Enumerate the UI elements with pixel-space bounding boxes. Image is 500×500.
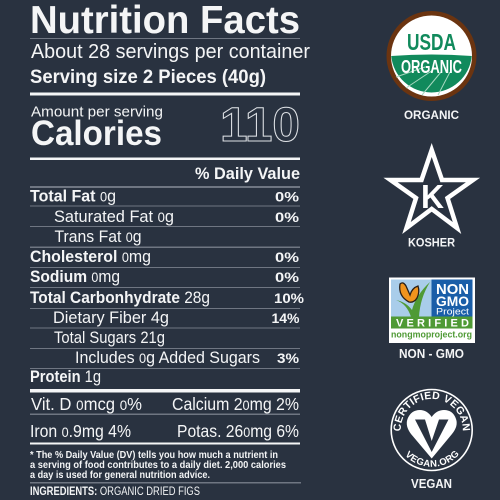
row: total fat: Total Fat 0g (30, 186, 116, 206)
row: vitamin d and calcium: Calcium 20mg 2% (172, 394, 299, 414)
badge: usda organic (386, 11, 476, 122)
badge: kosher (390, 150, 473, 250)
row: cholesterol (30, 247, 300, 266)
row: iron and potassium: Iron 0.9mg 4% (30, 421, 131, 441)
footnote (30, 449, 286, 481)
row: dietary fiber (53, 308, 300, 327)
icon: non-gmo project verified: Project (436, 306, 469, 318)
footnote: * The % Daily Value (DV) tells you how much a nutrient in (30, 449, 278, 461)
row: total sugars: Total Sugars 21g (54, 328, 165, 347)
icon: certified vegan seal: CERTIFIED VEGAN (394, 392, 470, 431)
calories value: 110 (220, 99, 300, 152)
row: saturated fat (54, 207, 300, 226)
badge: non-gmo (389, 278, 475, 361)
row: total carbohydrate: Total Carbonhydrate 28g (30, 288, 210, 307)
row: iron and potassium: Potas. 260mg 6% (177, 421, 299, 441)
row: total carbohydrate (30, 288, 305, 307)
label: vegan: VEGAN (411, 477, 452, 491)
row: vitamin d and calcium: Vit. D 0mcg 0% (31, 394, 142, 414)
row: protein: Protein 1g (30, 367, 101, 386)
row: saturated fat: Saturated Fat 0g (54, 207, 174, 226)
row: total fat: 0% (275, 188, 300, 204)
amount per serving: Amount per serving (31, 104, 163, 120)
row: cholesterol: 0% (275, 249, 300, 265)
icon: non-gmo project verified: nongmoproject.org (391, 330, 472, 340)
title: Nutrition Facts (30, 0, 300, 42)
icon: non-gmo project verified: VERIFIED (396, 318, 469, 330)
icon: usda seal: ORGANIC (401, 57, 462, 77)
footnote: a day is used for general nutrition advice. (30, 469, 210, 481)
row: total fat (30, 186, 300, 206)
icon: non-gmo project verified: NON (436, 281, 469, 298)
label: organic: ORGANIC (404, 108, 459, 122)
icon: certified vegan seal: VEGAN.ORG (406, 450, 458, 467)
icon: non-gmo project verified (389, 278, 475, 343)
servings per container: About 28 servings per container (31, 41, 310, 63)
daily value heading: % Daily Value (195, 165, 300, 183)
badge: vegan (390, 388, 473, 491)
icon: certified vegan seal (390, 388, 473, 472)
row: added sugars: Includes 0g Added Sugars (75, 348, 260, 367)
label: non-gmo: NON - GMO (399, 347, 464, 361)
label: kosher: KOSHER (408, 238, 456, 250)
row: total carbohydrate: 10% (274, 290, 305, 306)
ingredients: INGREDIENTS: ORGANIC DRIED FIGS (30, 486, 200, 498)
row: cholesterol: Cholesterol 0mg (30, 247, 151, 266)
icon: non-gmo project verified: GMO (436, 293, 469, 309)
row: iron and potassium (30, 421, 299, 441)
calories label: Calories (31, 114, 162, 153)
row: sodium (30, 267, 300, 286)
row: sodium: 0% (275, 269, 300, 285)
row: vitamin d and calcium (31, 394, 299, 414)
footnote: a serving of food contributes to a daily diet. 2,000 calories (30, 459, 286, 471)
row: dietary fiber: Dietary Fiber 4g (53, 308, 169, 327)
serving size: Serving size 2 Pieces (40g) (30, 67, 266, 88)
row: added sugars: 3% (277, 350, 300, 366)
icon: kosher star: K (421, 178, 444, 215)
row: sodium: Sodium 0mg (30, 267, 120, 286)
row: saturated fat: 0% (275, 209, 300, 225)
row: trans fat: Trans Fat 0g (54, 227, 142, 246)
panel: nutrition facts (30, 0, 310, 498)
icon: usda seal: USDA (407, 29, 456, 55)
row: dietary fiber: 14% (272, 310, 300, 326)
icon: usda seal (386, 11, 476, 101)
